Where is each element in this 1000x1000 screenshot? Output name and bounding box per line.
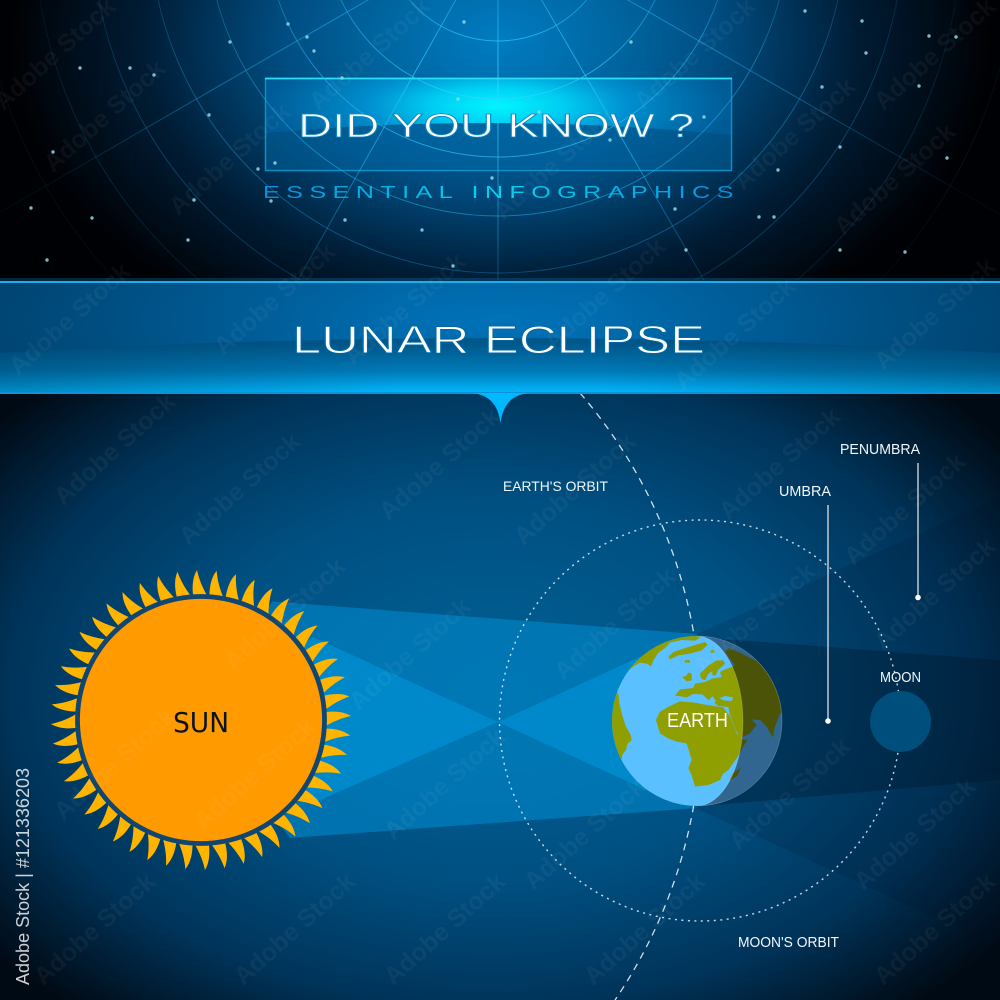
watermark: Adobe Stock (829, 117, 961, 241)
watermark: Adobe Stock (344, 592, 476, 716)
watermark: Adobe Stock (519, 772, 651, 896)
label: moon's orbit: MOON'S ORBIT (738, 935, 839, 951)
watermark: Adobe Stock (729, 72, 861, 196)
watermark: Adobe Stock (689, 557, 821, 681)
bottom background (0, 393, 1000, 1000)
watermark: Adobe Stock (379, 722, 511, 846)
watermark: Adobe Stock (724, 732, 856, 856)
watermark: Adobe Stock (549, 562, 681, 686)
watermark: Adobe Stock (174, 427, 306, 551)
penumbra pointer (915, 463, 921, 600)
watermark: Adobe Stock (579, 867, 711, 991)
polar grid (0, 0, 1000, 280)
moon (870, 691, 931, 752)
umbra and penumbra shadows (693, 497, 1000, 947)
watermark: Adobe Stock (4, 257, 136, 381)
watermark: Adobe Stock (39, 54, 171, 178)
title: DID YOU KNOW ? (298, 107, 694, 144)
watermark: Adobe Stock (869, 867, 1000, 991)
watermark: Adobe Stock (379, 867, 511, 991)
watermark: Adobe Stock (714, 402, 846, 526)
watermark: Adobe Stock (839, 447, 971, 571)
top background (0, 0, 1000, 282)
title box (265, 78, 732, 170)
watermark: Adobe Stock (29, 867, 161, 991)
watermark: Adobe Stock (49, 702, 181, 826)
watermark: Adobe Stock (869, 252, 1000, 376)
sun outer light beam (201, 602, 697, 838)
label: penumbra: PENUMBRA (840, 442, 920, 458)
earth's orbit (580, 393, 701, 1000)
watermark: Adobe Stock (509, 427, 641, 551)
watermark: Adobe Stock (189, 712, 321, 836)
watermark: Adobe Stock (374, 402, 506, 526)
watermark: Adobe Stock (219, 552, 351, 676)
earth: EARTH (667, 709, 728, 732)
stock id text: Adobe Stock | #121336203 (13, 768, 33, 985)
watermark: Adobe Stock (669, 272, 801, 396)
watermark: Adobe Stock (164, 97, 296, 221)
umbra pointer (825, 505, 831, 724)
watermark: Adobe Stock (489, 102, 621, 226)
watermark: Adobe Stock (539, 232, 671, 356)
label: moon: MOON (880, 670, 921, 686)
watermark: Adobe Stock (339, 247, 471, 371)
watermark: Adobe Stock (229, 867, 361, 991)
earth (612, 636, 782, 806)
banner heading: LUNAR ECLIPSE (292, 319, 705, 362)
stars (29, 9, 958, 268)
label: umbra: UMBRA (779, 484, 831, 500)
sun: SUN (173, 706, 229, 739)
banner (0, 278, 1000, 423)
subtitle: ESSENTIAL INFOGRAPHICS (263, 182, 733, 202)
moon's orbit (500, 520, 900, 921)
sun inner light cross (201, 637, 670, 803)
sun (51, 570, 351, 870)
label: earth's orbit: EARTH'S ORBIT (503, 478, 608, 494)
watermark: Adobe Stock (209, 237, 341, 361)
earth night side (697, 636, 782, 806)
watermark: Adobe Stock (49, 387, 181, 511)
watermark: Adobe Stock (869, 532, 1000, 656)
watermark: Adobe Stock (849, 772, 981, 896)
